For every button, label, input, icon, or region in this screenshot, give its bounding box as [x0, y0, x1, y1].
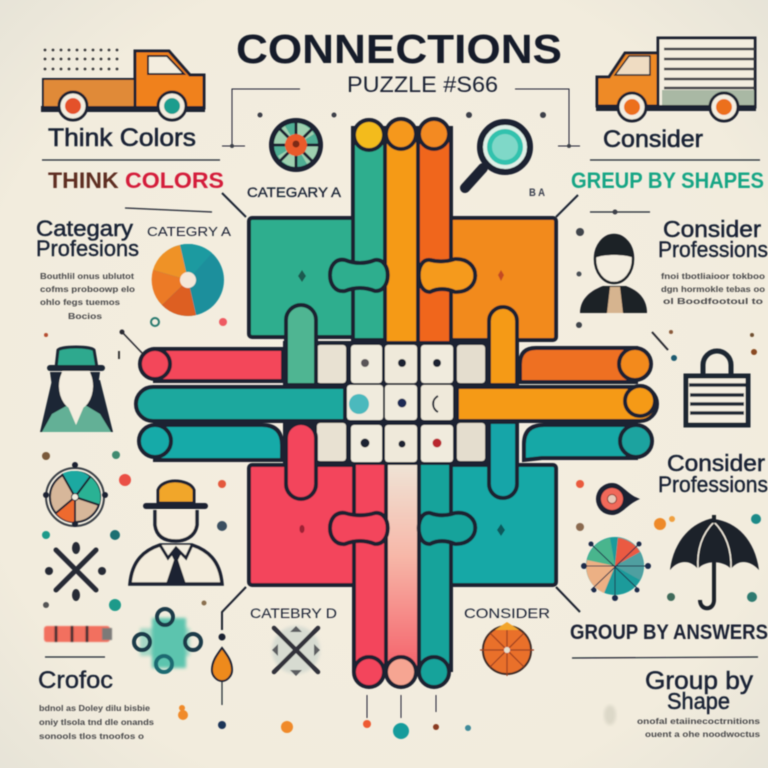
text block: consider professions top: fnoi tbotliaioor tokboo [661, 271, 765, 281]
vertical bars bottom [354, 463, 451, 687]
text block: category professions: ohlo fegs tuemos [40, 297, 120, 307]
text block: category professions: Bocios [68, 311, 102, 321]
text block: crofoc: Crofoc [38, 667, 113, 694]
text block: category professions: Profesions [36, 236, 139, 261]
icon: x with arrows [272, 626, 320, 676]
text block: consider professions top [658, 216, 768, 306]
label: think colors: Think Colors [48, 124, 196, 152]
horizontal bars left [136, 349, 345, 460]
text block: group by shape: Group by [645, 667, 754, 695]
icon: donut chart [152, 244, 224, 316]
icon: person with teal hat [40, 347, 113, 432]
panel: teal square [449, 465, 556, 585]
text block: consider professions top: Consider [663, 216, 761, 242]
icon: network circle [581, 537, 651, 601]
icon: magnifying glass [465, 122, 530, 188]
panel: red square [249, 465, 356, 585]
horizontal bars right [457, 348, 657, 460]
icon: person with yellow hat [130, 481, 222, 584]
icon: segmented wheel [43, 462, 108, 527]
label: consider: Consider [603, 126, 703, 153]
text block: category professions [36, 216, 139, 321]
grid backing [283, 341, 517, 465]
text block: crofoc: oniy tlsola tnd dle onands [39, 717, 154, 727]
text block: consider professions top: ol Boodfootoul to [663, 296, 763, 306]
text block: crofoc [38, 667, 154, 741]
grid cells [317, 345, 485, 462]
label: category a: CATEGARY A [247, 184, 342, 200]
icon: color wheel [269, 118, 323, 172]
vertical bars top [353, 119, 451, 343]
icon: padlock bag [686, 351, 748, 425]
icon: striped bar [44, 626, 112, 642]
person: suit icon [580, 235, 647, 313]
text block: category professions: Bouthlil onus ublutot [40, 271, 134, 281]
text block: group by shape [637, 667, 760, 739]
icon: crossed x [45, 542, 106, 601]
icon: connector [134, 609, 201, 672]
puzzle knobs [330, 259, 475, 544]
heading: think colors: THINK COLORS [48, 168, 224, 193]
label: category a secondary: CATEGRY A [147, 224, 231, 239]
title [236, 26, 562, 97]
text block: crofoc: bdnol as Doley dilu bisbie [39, 703, 150, 713]
puzzle: central grid [136, 119, 657, 687]
text block: consider professions top: dgn hormokle tebas oo [661, 284, 765, 294]
text block: crofoc: sonools tlos tnoofos o [39, 731, 144, 741]
icon: teardrop target [596, 483, 640, 515]
icon: umbrella [670, 515, 759, 608]
icon: drop pins [178, 634, 471, 739]
vertical stubs [286, 305, 517, 499]
text block: category professions: Categary [36, 216, 133, 241]
subtitle: PUZZLE #S66 [347, 72, 498, 97]
decorative dots [42, 228, 761, 725]
panel: orange square [449, 218, 556, 340]
panel: green square [249, 218, 355, 337]
title: CONNECTIONS [236, 26, 562, 72]
text block: consider professions mid [658, 450, 768, 497]
text block: consider professions mid: Consider [667, 450, 765, 476]
text block: category professions: cofms proboowp elo [40, 284, 135, 294]
icon: pickup truck [41, 49, 205, 120]
icon: box truck [596, 38, 756, 121]
label: category d: CATEBRY D [250, 605, 337, 621]
label: b: B A [529, 187, 545, 199]
text block: group by shape: ouent a ohe noodwoctus [645, 729, 760, 739]
text block: group by shape: onofal etaiinecoctrnitions [637, 716, 760, 726]
label: consider lower: CONSIDER [464, 605, 550, 621]
text block: group by shape: Shape [667, 688, 730, 714]
icon: orange wheel [480, 622, 534, 676]
